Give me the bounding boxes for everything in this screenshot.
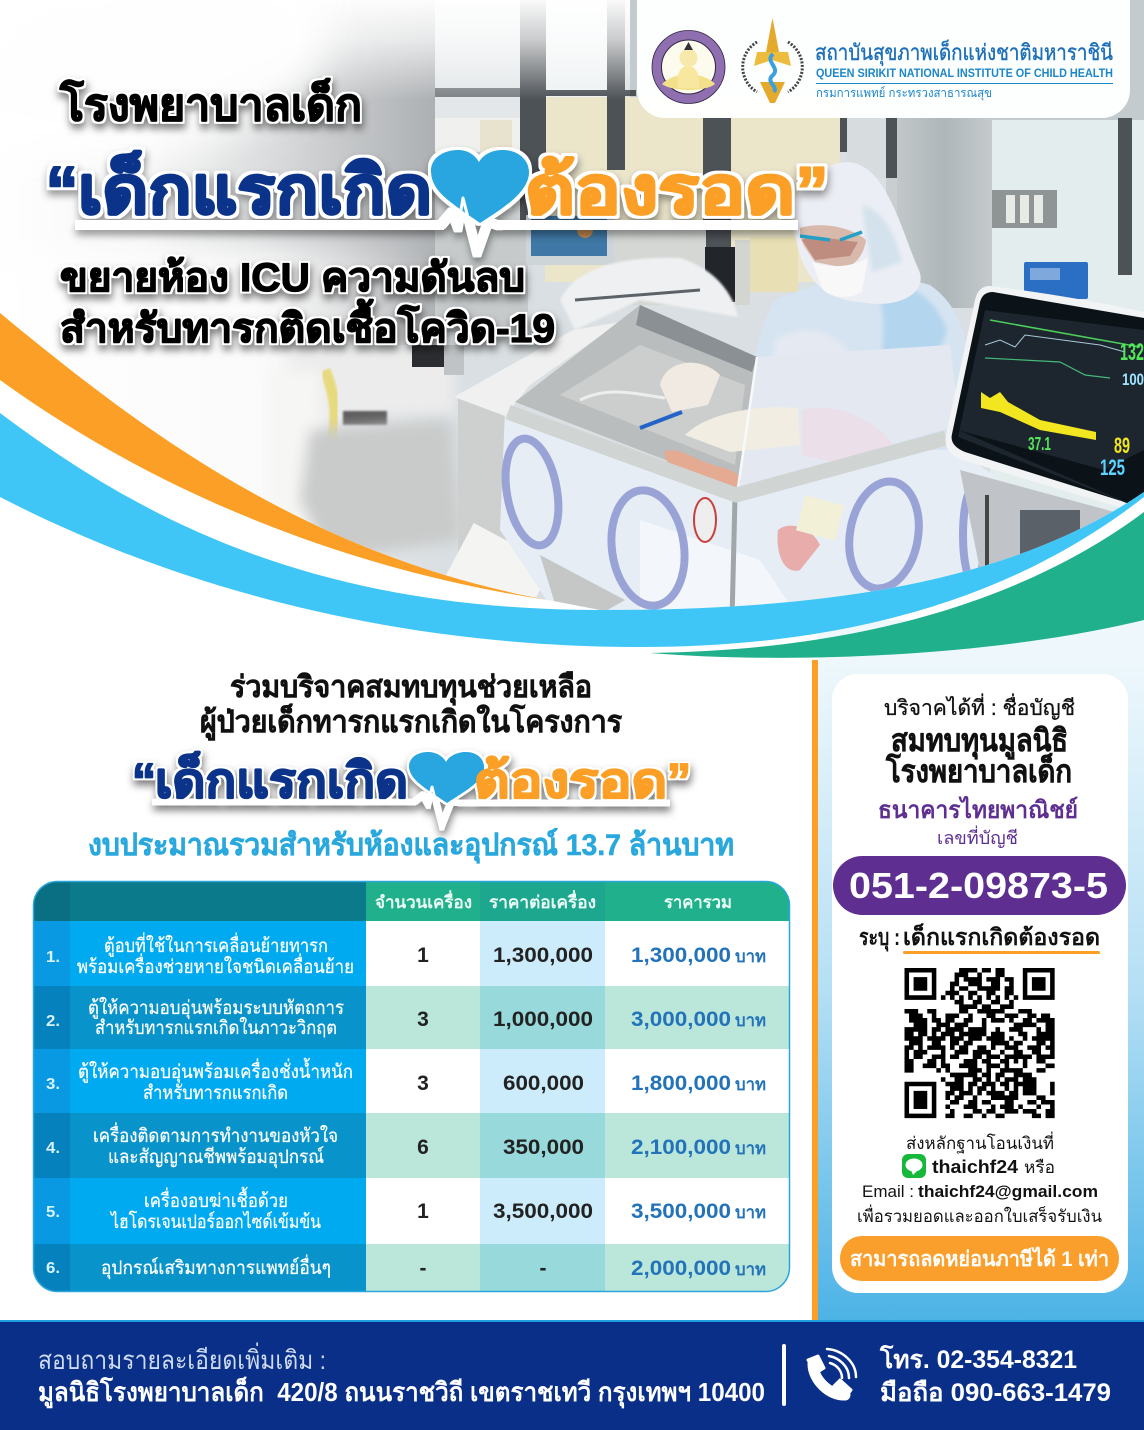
incubator bracket and white blanket <box>454 322 620 416</box>
proof of transfer instructions: เพื่อรวมยอดและออกใบเสร็จรับเงิน <box>857 1204 1102 1226</box>
footer address <box>38 1342 765 1409</box>
vital signs monitor <box>946 286 1144 512</box>
QR code <box>904 970 1055 1116</box>
logo wordmark: QUEEN SIRIKIT NATIONAL INSTITUTE OF CHILD HEALTH <box>816 68 1113 80</box>
gas panel <box>992 190 1057 228</box>
row 1: พร้อมเครื่องช่วยหายใจชนิดเคลื่อนย้าย <box>77 953 354 978</box>
tax deduction pill <box>840 1236 1119 1281</box>
swoop: green <box>650 512 1144 658</box>
proof of transfer instructions: thaichf24 <box>932 1157 1018 1177</box>
panel background top <box>818 620 1144 661</box>
PPE suit body <box>751 278 971 450</box>
icon: phone <box>808 1349 856 1398</box>
row 1: 1,300,000 <box>631 944 731 967</box>
row 6: 2,000,000 <box>631 1257 731 1280</box>
logo wordmark: กรมการแพทย์ กระทรวงสาธารณสุข <box>816 86 992 101</box>
logo card <box>637 0 1130 118</box>
account number pill <box>833 856 1126 915</box>
incubator rail <box>508 412 946 495</box>
porthole rings <box>498 434 985 610</box>
row 2 <box>46 997 766 1039</box>
mesh drape <box>300 420 462 560</box>
icon: LINE <box>902 1154 926 1178</box>
row 2: 3 <box>417 1008 429 1031</box>
campaign logo small: ” <box>667 755 691 808</box>
vital signs monitor: 89 <box>1114 433 1130 458</box>
row 4: บาท <box>735 1139 766 1158</box>
campaign logo small: เด็กแรกเกิด <box>155 751 408 808</box>
swoop: orange <box>0 313 548 600</box>
metal cabinet <box>847 118 886 120</box>
row 6: บาท <box>735 1260 766 1279</box>
row 3: 3 <box>417 1072 429 1095</box>
cream curtains <box>545 97 840 282</box>
row 2: 1,000,000 <box>493 1008 593 1031</box>
donation heading line two: ผู้ป่วยเด็กทารกแรกเกิดในโครงการ <box>200 703 622 741</box>
gloved hands and baby <box>660 363 720 412</box>
reference note: เด็กแรกเกิดต้องรอด <box>903 922 1100 950</box>
donation heading line one: ร่วมบริจาคสมทบทุนช่วยเหลือ <box>230 671 592 706</box>
vital signs monitor: 125 <box>1100 455 1125 480</box>
row 1: 1. <box>46 949 60 966</box>
PPE hood <box>792 162 921 304</box>
row 4: 350,000 <box>503 1136 584 1159</box>
swoop: light blue <box>0 413 1144 647</box>
row 1: 1 <box>417 944 429 967</box>
panel: donation details <box>812 660 1144 1321</box>
row 1: บาท <box>735 947 766 966</box>
campaign logo large: ต้องรอด <box>525 153 795 227</box>
bank name <box>878 795 1078 848</box>
campaign logo small <box>132 751 691 825</box>
row 4: 2,100,000 <box>631 1136 731 1159</box>
row 5: ไฮโดรเจนเปอร์ออกไซด์เข้มข้น <box>109 1210 321 1233</box>
bank name: เลขที่บัญชี <box>937 825 1018 848</box>
row 1: ตู้อบที่ใช้ในการเคลื่อนย้ายทารก <box>104 932 328 957</box>
dark window frames and columns <box>520 0 1132 275</box>
budget line: งบประมาณรวมสำหรับห้องและอุปกรณ์ 13.7 ล้านบาท <box>88 828 734 864</box>
proof of transfer instructions: Email : <box>862 1182 914 1201</box>
icon: children's hospital foundation seal <box>652 30 725 104</box>
account number pill: 051-2-09873-5 <box>849 865 1108 906</box>
left soft gray fade <box>0 0 435 345</box>
windows above curtain <box>435 84 520 118</box>
row 3: 3. <box>46 1076 60 1093</box>
row 5: 1 <box>417 1200 429 1223</box>
footer address: มูลนิธิโรงพยาบาลเด็ก 420/8 ถนนราชวิถี เขตราชเทวี กรุงเทพฯ 10400 <box>38 1376 765 1409</box>
row 3: 600,000 <box>503 1072 584 1095</box>
row 5: 5. <box>46 1204 60 1221</box>
reference note: ระบุ : <box>859 924 900 952</box>
logo wordmark <box>815 38 1113 101</box>
footer phone numbers: โทร. 02-354-8321 <box>879 1344 1077 1374</box>
budget table <box>33 881 790 1292</box>
row 5: 3,500,000 <box>493 1200 593 1223</box>
campaign logo large: เด็กแรกเกิด <box>78 150 432 227</box>
bank name: ธนาคารไทยพาณิชย์ <box>878 795 1078 824</box>
hero title block <box>46 78 828 351</box>
table header row <box>33 881 790 921</box>
row 4: เครื่องติดตามการทำงานของหัวใจ <box>93 1122 338 1147</box>
warning sign and baby foot <box>694 498 716 542</box>
table header row: ราคาต่อเครื่อง <box>489 890 596 912</box>
row 4: 6 <box>417 1136 429 1159</box>
row 1 <box>46 932 766 978</box>
row 2: ตู้ให้ความอบอุ่นพร้อมระบบหัตถการ <box>88 997 344 1020</box>
swoop: white cover below photo <box>0 313 1144 660</box>
table header row: จำนวนเครื่อง <box>375 890 472 912</box>
footer phone numbers: มือถือ 090-663-1479 <box>880 1379 1111 1407</box>
row 5 <box>46 1187 766 1233</box>
campaign logo small: ต้องรอด <box>474 755 667 808</box>
row 3 <box>46 1058 766 1104</box>
face, goggles and mask <box>800 225 866 268</box>
row 3: สำหรับทารกแรกเกิด <box>143 1083 288 1104</box>
incubator canopy <box>515 305 757 488</box>
row 6: 6. <box>46 1260 60 1277</box>
row 3: ตู้ให้ความอบอุ่นพร้อมเครื่องชั่งน้ำหนัก <box>78 1058 353 1084</box>
proof of transfer instructions <box>857 1131 1102 1226</box>
reference note <box>859 922 1100 954</box>
column backgrounds <box>33 921 790 1292</box>
donate account name: สมทบทุนมูลนิธิ <box>891 723 1068 760</box>
row 5: เครื่องอบฆ่าเชื้อด้วย <box>144 1187 288 1212</box>
campaign logo large <box>46 150 828 253</box>
row 2: 3,000,000 <box>631 1008 731 1031</box>
yellow waveform <box>981 392 1096 440</box>
equipment display behind heading <box>433 222 528 332</box>
footer phone numbers <box>879 1344 1111 1407</box>
campaign logo large: ” <box>796 153 828 227</box>
table header row: ราคารวม <box>664 893 732 912</box>
equipment lower right <box>960 470 1112 567</box>
row 6: - <box>540 1257 546 1280</box>
proof of transfer instructions: ส่งหลักฐานโอนเงินที่ <box>906 1131 1054 1154</box>
hero photo: incubator room <box>147 0 1144 610</box>
row 4: 4. <box>46 1140 60 1157</box>
proof of transfer instructions: thaichf24@gmail.com <box>918 1182 1098 1201</box>
campaign logo large: “ <box>46 153 78 227</box>
back wall, right side <box>990 100 1144 520</box>
row 2: 2. <box>46 1013 60 1030</box>
icon: heart with pulse <box>431 150 529 223</box>
footer address: สอบถามรายละเอียดเพิ่มเติม : <box>38 1342 326 1375</box>
row 4 <box>46 1122 766 1169</box>
donate account name: บริจาคได้ที่ : ชื่อบัญชี <box>884 693 1075 720</box>
blue drawer box <box>1024 262 1088 299</box>
subtitle line two: สำหรับทารกติดเชื้อโควิด-19 <box>60 299 555 351</box>
row 2: บาท <box>735 1011 766 1030</box>
row 1: 1,300,000 <box>493 944 593 967</box>
footer band <box>0 1320 1144 1430</box>
row 6: - <box>420 1257 426 1280</box>
PPE figure lower left <box>368 340 456 415</box>
vital signs monitor: 37.1 <box>1028 434 1051 454</box>
title: hospital name: โรงพยาบาลเด็ก <box>59 78 362 130</box>
row 6: อุปกรณ์เสริมทางการแพทย์อื่นๆ <box>101 1254 331 1280</box>
row 3: 1,800,000 <box>631 1072 731 1095</box>
proof of transfer instructions: หรือ <box>1024 1158 1055 1177</box>
icon: heart with pulse small <box>409 752 484 803</box>
donate account name <box>884 693 1075 789</box>
row 6 <box>46 1254 766 1280</box>
row 2: สำหรับทารกแรกเกิดในภาวะวิกฤต <box>95 1017 337 1039</box>
incubator lower body <box>500 410 1000 620</box>
tax deduction pill: สามารถลดหย่อนภาษีได้ 1 เท่า <box>850 1246 1109 1271</box>
row 3: บาท <box>735 1075 766 1094</box>
row 5: บาท <box>735 1203 766 1222</box>
row 5: 3,500,000 <box>631 1200 731 1223</box>
campaign logo small: “ <box>132 755 156 808</box>
icon: institute emblem <box>743 18 802 103</box>
subtitle line one: ขยายห้อง ICU ความดันลบ <box>60 256 525 300</box>
donate account name: โรงพยาบาลเด็ก <box>885 752 1072 789</box>
row 4: และสัญญาณชีพพร้อมอุปกรณ์ <box>108 1146 324 1169</box>
